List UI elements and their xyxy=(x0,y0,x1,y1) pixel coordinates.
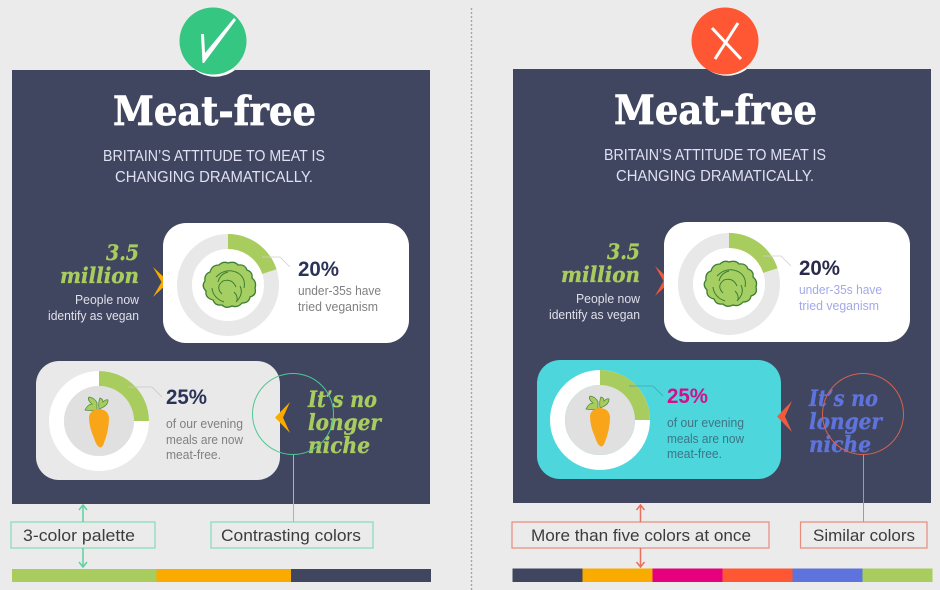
subtitle: BRITAIN’S ATTITUDE TO MEAT IS xyxy=(604,147,826,164)
text: 20% xyxy=(298,258,381,314)
text: 25%: meat-free. xyxy=(667,446,722,461)
leader line xyxy=(629,386,663,396)
icon: lettuce xyxy=(704,261,757,306)
panel: bad example xyxy=(512,8,932,582)
text: 25% xyxy=(667,385,745,461)
card: 25% stat xyxy=(36,361,280,480)
subtitle: CHANGING DRAMATICALLY. xyxy=(115,169,313,186)
callout: 3-color palette label: 3-color palette xyxy=(23,526,135,545)
poster background xyxy=(513,69,931,503)
text: 20%: under-35s have xyxy=(298,283,381,298)
callout: contrast highlight circle xyxy=(252,374,334,522)
donut chart 25% xyxy=(558,370,650,462)
donut chart 20% xyxy=(184,234,276,328)
title: Meat-free xyxy=(113,88,316,135)
text: 25%: meals are now xyxy=(166,432,244,447)
text: It's no longer niche: niche xyxy=(809,432,871,458)
text: 20%: 20% xyxy=(799,257,840,280)
text: 25%: of our evening xyxy=(166,416,243,431)
subtitle xyxy=(103,148,325,186)
text: It's no longer niche: longer xyxy=(809,409,884,435)
card: 25% stat xyxy=(537,360,781,479)
icon: lettuce xyxy=(203,262,256,307)
callout: similar colors label xyxy=(800,522,927,548)
stat: 3.5 million: People now xyxy=(576,291,641,306)
callout: similar colors highlight circle xyxy=(822,374,904,522)
stat: 3.5 million: identify as vegan xyxy=(48,308,139,323)
stat: 3.5 million: 3.5 xyxy=(106,241,139,266)
stat: 3.5 million: million xyxy=(60,264,139,289)
callout: contrasting colors label: Contrasting colors xyxy=(221,526,361,545)
text: 20%: tried veganism xyxy=(298,299,378,314)
text: 20%: tried veganism xyxy=(799,298,879,313)
palette bar xyxy=(512,568,932,582)
text: 25% xyxy=(166,386,244,462)
text: 25%: meat-free. xyxy=(166,447,221,462)
text: It's no longer niche xyxy=(307,387,383,459)
leader line xyxy=(128,387,162,397)
callout: contrasting colors label xyxy=(211,522,373,548)
card: 20% stat xyxy=(664,222,910,342)
text: 25%: of our evening xyxy=(667,415,744,430)
callout: similar colors label: Similar colors xyxy=(813,526,915,545)
stat: 3.5 million xyxy=(48,241,140,323)
subtitle: CHANGING DRAMATICALLY. xyxy=(616,168,814,185)
text: 20%: 20% xyxy=(298,258,339,281)
text: 25%: 25% xyxy=(166,386,207,409)
stat: 3.5 million: identify as vegan xyxy=(549,307,640,322)
subtitle: BRITAIN’S ATTITUDE TO MEAT IS xyxy=(103,148,325,165)
card: 20% stat xyxy=(163,223,409,343)
arrow: red chevron right xyxy=(655,266,671,296)
text: It's no longer niche: It’s no xyxy=(808,386,878,412)
callout: more than five colors label xyxy=(512,522,769,548)
text: 25%: 25% xyxy=(667,385,708,408)
stat: 3.5 million: million xyxy=(561,263,640,288)
leader line xyxy=(763,256,791,266)
icon: carrot xyxy=(586,396,610,446)
stat: 3.5 million xyxy=(549,240,641,322)
arrow: red chevron left xyxy=(777,401,792,432)
panel: good example xyxy=(11,8,431,582)
poster background xyxy=(12,70,430,504)
subtitle xyxy=(604,147,826,185)
text: It's no longer niche: niche xyxy=(308,433,370,459)
text: 20%: under-35s have xyxy=(799,282,882,297)
stat: 3.5 million: People now xyxy=(75,292,140,307)
donut chart 20% xyxy=(686,233,778,328)
arrow: orange chevron right xyxy=(153,267,169,297)
icon: carrot xyxy=(85,397,109,448)
callout: 3-color palette label xyxy=(11,522,155,548)
text: It's no longer niche: longer xyxy=(308,410,383,436)
callout: more than five colors label: More than five colors at once xyxy=(531,526,751,545)
title: Meat-free xyxy=(614,87,817,134)
arrow: double arrows from label xyxy=(79,505,87,567)
text: 25%: meals are now xyxy=(667,431,745,446)
text: It's no longer niche xyxy=(808,386,884,458)
icon: cross badge xyxy=(692,8,758,76)
stat: 3.5 million: 3.5 xyxy=(607,240,640,265)
donut chart 25% xyxy=(56,371,149,464)
arrow: orange chevron left xyxy=(275,402,290,433)
arrow: double arrows from label xyxy=(636,505,644,567)
text: It's no longer niche: It’s no xyxy=(307,387,377,413)
text: 20% xyxy=(799,257,882,313)
icon: check mark badge xyxy=(180,8,246,77)
leader line xyxy=(262,257,290,267)
palette bar xyxy=(12,569,431,582)
